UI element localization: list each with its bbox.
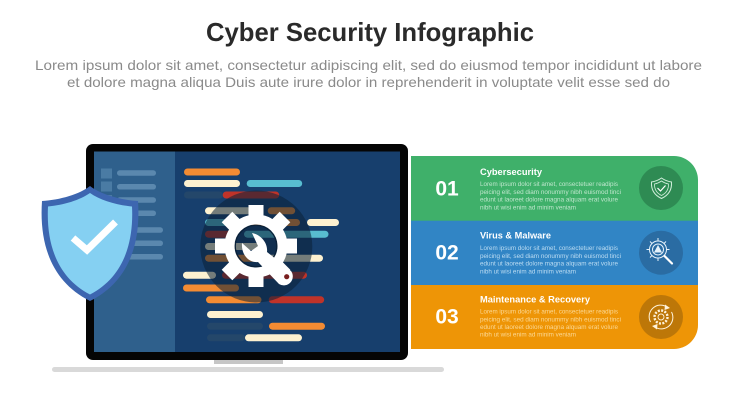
body text (480, 245, 622, 275)
body text: Lorem ipsum dolor sit amet, consectetuer readipis (480, 181, 619, 188)
panel: maintenance and recovery (411, 285, 698, 349)
body text: Lorem ipsum dolor sit amet, consectetuer readipis (480, 245, 619, 252)
subtitle text: Lorem ipsum dolor sit amet, consectetur adipiscing elit, sed do eiusmod tempor incididunt ut labore (35, 57, 702, 73)
number 03: 03 (435, 306, 459, 328)
number 01: 01 (435, 178, 459, 200)
icon: shield badge (639, 166, 683, 210)
heading: Cybersecurity (480, 167, 543, 178)
laptop stand (214, 359, 283, 364)
dark circle behind gear (200, 190, 312, 302)
icon: malware search (639, 231, 683, 275)
blue band (411, 221, 698, 286)
laptop frame (86, 144, 408, 360)
body text: edunt ut laoreet dolore magna alquam erat volure (480, 324, 618, 331)
body text: peicing elit, sed diam nonummy nibh euismod tinci (480, 189, 622, 196)
body text (480, 308, 622, 339)
body text: edunt ut laoreet dolore magna alquam erat volure (480, 261, 618, 268)
title: Cyber Security Infographic (206, 17, 534, 47)
icon: gear and wrench (215, 205, 297, 287)
body text: edunt ut laoreet dolore magna alquam erat volure (480, 197, 618, 204)
code lines (183, 168, 339, 341)
number 02: 02 (435, 242, 459, 264)
body text: nibh ut wisi enim ad minim veniam (480, 268, 576, 275)
body text (480, 181, 622, 211)
body text: peicing elit, sed diam nonummy nibh euismod tinci (480, 253, 622, 260)
subtitle text (35, 57, 702, 90)
body text: peicing elit, sed diam nonummy nibh euismod tinci (480, 316, 622, 323)
laptop ground shadow (52, 367, 444, 372)
heading: Virus & Malware (480, 231, 551, 242)
icon: security shield with check (42, 186, 138, 301)
subtitle text: et dolore magna aliqua Duis aute irure dolor in reprehenderit in voluptate velit esse sed do (67, 74, 670, 90)
green band (411, 156, 698, 221)
laptop screen (94, 152, 400, 352)
body text: Lorem ipsum dolor sit amet, consectetuer readipis (480, 308, 619, 316)
laptop illustration (42, 144, 444, 372)
screen sidebar (94, 152, 175, 352)
panel: cybersecurity (411, 156, 698, 221)
body text: nibh ut wisi enim ad minim veniam (480, 332, 576, 339)
panel: virus and malware (411, 221, 698, 286)
orange band (411, 285, 698, 349)
heading: Maintenance & Recovery (480, 294, 591, 306)
icon: gear with recovery arrows (639, 295, 683, 339)
body text: nibh ut wisi enim ad minim veniam (480, 204, 576, 211)
